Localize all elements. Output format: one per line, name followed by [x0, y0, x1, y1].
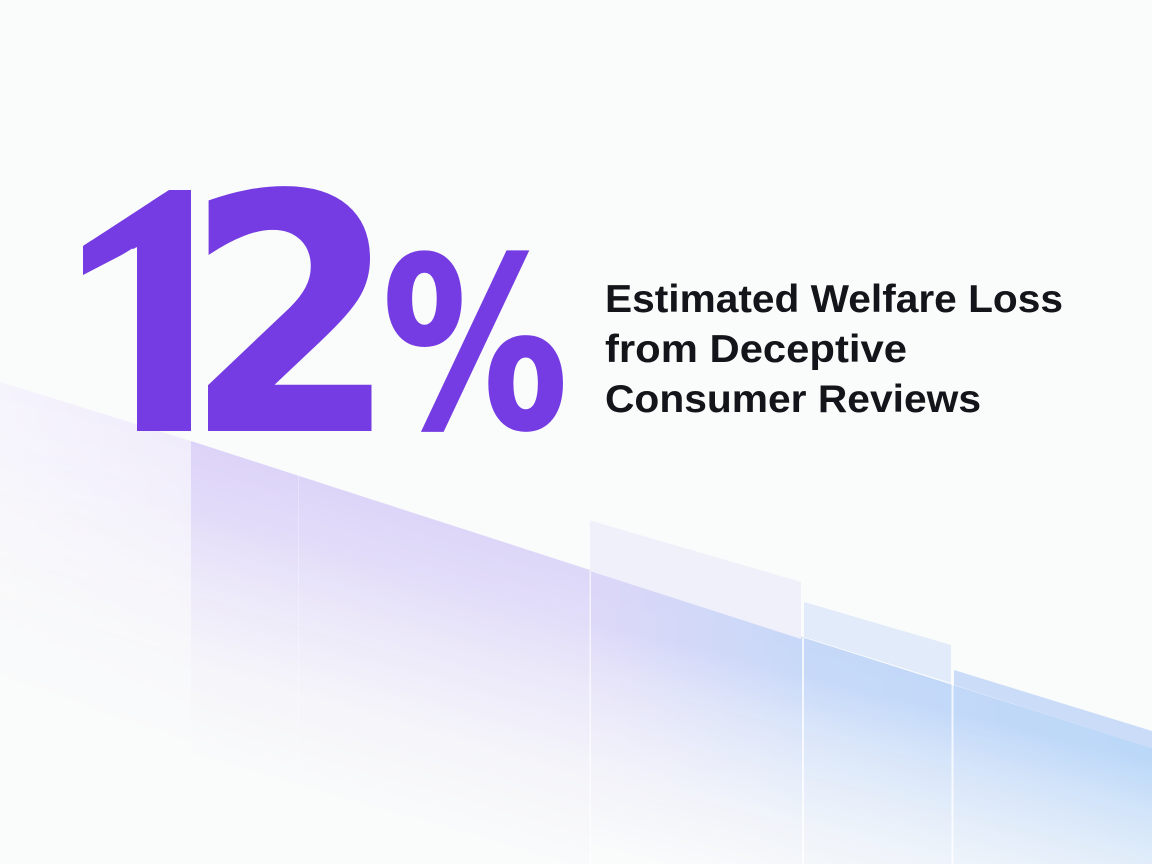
chart: declining translucent columns	[0, 382, 1152, 864]
percent sign: %	[382, 208, 568, 483]
headline line 2: from Deceptive	[605, 328, 907, 371]
column 4 raised top	[590, 520, 801, 639]
columns 2 and 3: purple gradient area under the slope	[191, 441, 590, 758]
digit 2: 2	[184, 126, 397, 509]
headline line 3: Consumer Reviews	[605, 378, 981, 421]
digit 1: 1	[60, 120, 252, 505]
headline line 1: Estimated Welfare Loss	[605, 278, 1063, 321]
headline	[605, 278, 1063, 421]
column 6 raised top	[954, 670, 1152, 748]
column 1: faint left column	[0, 383, 191, 557]
column divider lines	[298, 476, 954, 864]
columns 4 to 6: blue gradient area under the slope	[590, 570, 1152, 864]
big number: 12%	[83, 186, 563, 432]
column 5 raised top	[804, 602, 951, 683]
